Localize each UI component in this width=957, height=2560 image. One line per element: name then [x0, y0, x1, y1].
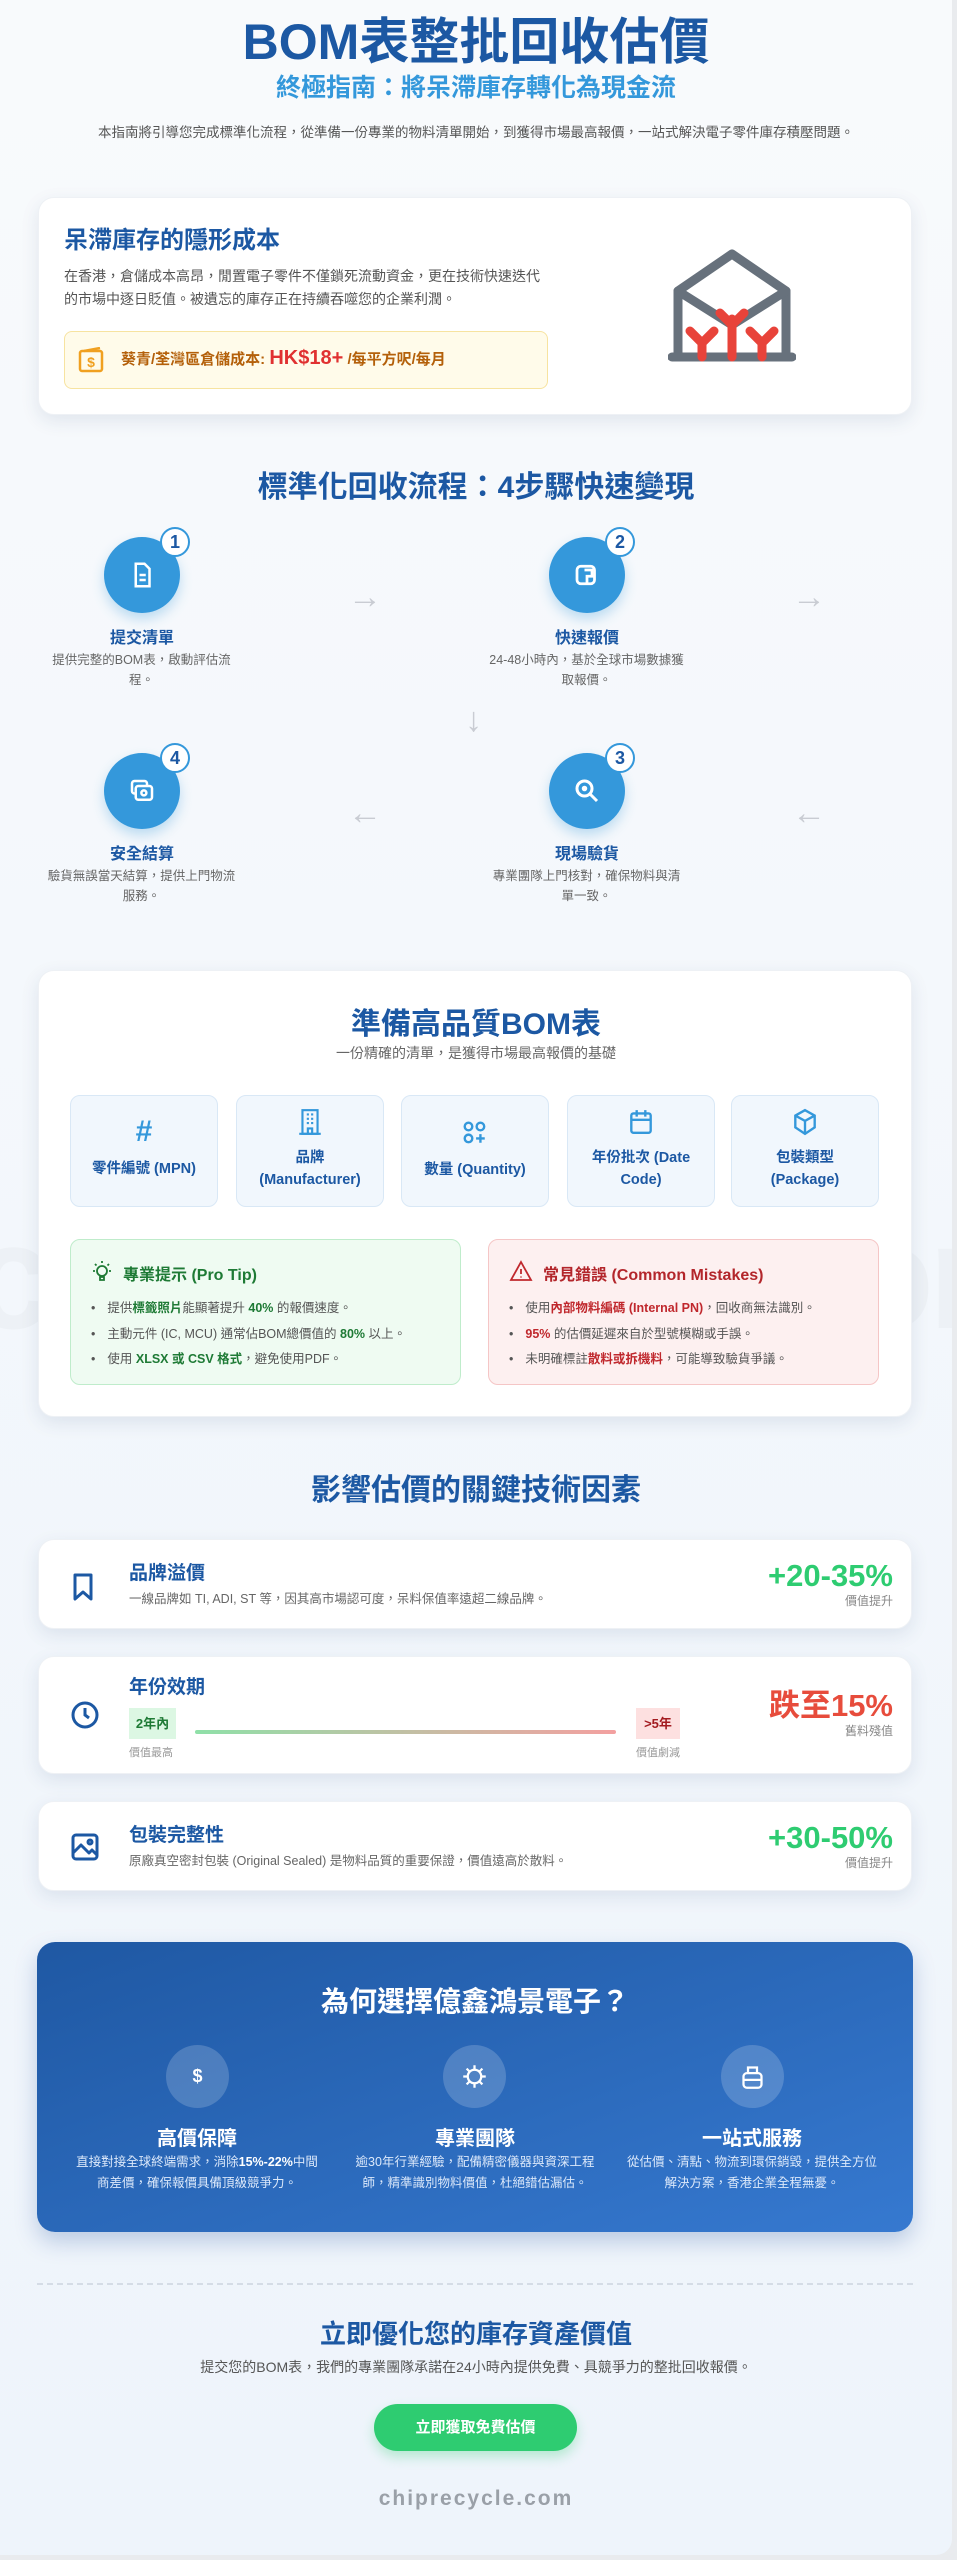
- intro text: 本指南將引導您完成標準化流程，從準備一份專業的物料清單開始，到獲得市場最高報價，一站式解決電子零件庫存積壓問題。: [98, 125, 854, 140]
- factor card: date code: 舊料殘值: [845, 1724, 893, 1738]
- heading: BOM: 準備高品質BOM表: [351, 1008, 601, 1041]
- arrow: down: ↓: [465, 701, 482, 739]
- icon: clock: [72, 1702, 98, 1728]
- field: package: [731, 1095, 879, 1207]
- arrow: →: [792, 578, 826, 616]
- tip box: common mistakes: 使用內部物料編碼 (Internal PN)，回收商無法識別。: [525, 1301, 816, 1315]
- tip box: common mistakes: 95% 的估價延遲來自於型號模糊或手誤。: [525, 1326, 754, 1340]
- arrow: →: [348, 578, 382, 616]
- field: manufacturer: [236, 1095, 384, 1207]
- text: high price: 高價保障: [157, 2128, 237, 2150]
- icon: warehouse: [668, 249, 796, 362]
- title: BOM表整批回收估價: [243, 14, 709, 70]
- icon: search: [549, 753, 625, 829]
- panel: hidden cost: [38, 197, 912, 415]
- panel: why choose us: [37, 1942, 913, 2232]
- arrow: left: ←: [348, 794, 382, 832]
- arrow: left: ←: [792, 794, 826, 832]
- chart: age bar: [129, 1708, 680, 1759]
- CTA text: 提交您的BOM表，我們的專業團隊承諾在24小時內提供免費、具競爭力的整批回收報價。: [200, 2359, 752, 2375]
- step 2: [489, 527, 684, 687]
- tip box: pro tip: 提供標籤照片能顯著提升 40% 的報價速度。: [107, 1301, 352, 1315]
- callout: storage cost: 葵青/荃灣區倉儲成本: HK$18+ /每平方呎/每月: [121, 347, 446, 369]
- factor card: packaging: [38, 1801, 912, 1891]
- step 4: [48, 743, 235, 903]
- tip box: pro tip: 專業提示 (Pro Tip): [123, 1267, 257, 1284]
- text: one stop: 一站式服務: [702, 2128, 802, 2150]
- icon: payment: [104, 753, 180, 829]
- factor card: date code: 跌至15%: [769, 1688, 893, 1723]
- step 3: 3: [615, 748, 625, 768]
- field: manufacturer: (Manufacturer): [259, 1172, 361, 1188]
- CTA button: 立即獲取免費估價: [415, 2419, 536, 2436]
- field: package: (Package): [771, 1172, 839, 1188]
- icon: money: $: [87, 354, 95, 370]
- chart: age bar: 價值最高: [129, 1747, 173, 1759]
- chart: age bar: >5年: [644, 1716, 672, 1731]
- paragraph: 在香港，倉儲成本高昂，閒置電子零件不僅鎖死流動資金，更在技術快速迭代的市場中逐日貶值。被遺忘的庫存正在持續吞噬您的企業利潤。: [64, 268, 540, 307]
- step 2: 快速報價: [555, 630, 619, 647]
- step 4: 驗貨無誤當天結算，提供上門物流服務。: [48, 869, 235, 903]
- field: date code: 年份批次 (Date: [592, 1150, 690, 1166]
- icon: money: [78, 347, 104, 372]
- step 1: [52, 527, 231, 687]
- heading: 為何選擇億鑫鴻景電子？: [321, 1986, 629, 2017]
- chart: age bar: 2年內: [136, 1716, 169, 1731]
- heading: process: 標準化回收流程：4步驟快速變現: [258, 471, 694, 504]
- factor card: date code: [38, 1656, 912, 1774]
- icon: bulb: [93, 1261, 111, 1281]
- icon: file: [104, 537, 180, 613]
- factor card: date code: 年份效期: [129, 1677, 205, 1698]
- step 4: 安全結算: [110, 846, 174, 863]
- factor card: packaging: 原廠真空密封包裝 (Original Sealed) 是物料品質的重要保證，價值遠高於散料。: [129, 1854, 567, 1868]
- CTA heading: 立即優化您的庫存資產價值: [320, 2319, 632, 2349]
- panel: why choose us: 從估價、清點、物流到環保銷毀，提供全方位解決方案，香港企業全程無憂。: [627, 2155, 877, 2190]
- icon: box: [721, 2045, 784, 2108]
- icon: dollar: $: [192, 2066, 202, 2086]
- panel: why choose us: 逾30年行業經驗，配備精密儀器與資深工程師，精準識別物料價值，杜絕錯估漏估。: [356, 2155, 594, 2190]
- field: package: 包裝類型: [776, 1150, 834, 1166]
- field: quantity: [401, 1095, 549, 1207]
- panel: why choose us: 直接對接全球終端需求，消除15%-22%中間商差價，確保報價具備頂級競爭力。: [76, 2155, 318, 2190]
- step 3: 專業團隊上門核對，確保物料與清單一致。: [493, 869, 680, 903]
- panel: BOM quality: [38, 970, 912, 1417]
- icon: chip: [443, 2045, 506, 2108]
- icon: dollar: [166, 2045, 229, 2108]
- factor card: packaging: 價值提升: [845, 1856, 893, 1870]
- field: MPN: [70, 1095, 218, 1207]
- step 3: 現場驗貨: [555, 846, 619, 863]
- icon: bookmark: [74, 1574, 92, 1601]
- factor card: brand: 品牌溢價: [129, 1563, 205, 1584]
- step 1: 提供完整的BOM表，啟動評估流程。: [52, 653, 231, 687]
- step 1: 提交清單: [110, 630, 174, 647]
- heading: 呆滯庫存的隱形成本: [64, 227, 280, 254]
- tip box: pro tip: 主動元件 (IC, MCU) 通常佔BOM總價值的 80% 以上。: [107, 1326, 406, 1340]
- tip box: common mistakes: 未明確標註散料或拆機料，可能導致驗貨爭議。: [525, 1352, 788, 1366]
- factor card: brand: [38, 1539, 912, 1629]
- step 4: 4: [170, 748, 180, 768]
- tip box: pro tip: [70, 1239, 461, 1385]
- field: quantity: 數量 (Quantity): [424, 1162, 526, 1178]
- icon: quote: [549, 537, 625, 613]
- step 2: 2: [615, 532, 625, 552]
- field: MPN: #: [136, 1115, 152, 1148]
- field: date code: [567, 1095, 715, 1207]
- subtitle: 終極指南：將呆滯庫存轉化為現金流: [276, 74, 676, 102]
- tip box: common mistakes: [488, 1239, 879, 1385]
- tip box: common mistakes: 常見錯誤 (Common Mistakes): [543, 1267, 763, 1284]
- field: manufacturer: 品牌: [296, 1150, 324, 1166]
- factor card: packaging: 包裝完整性: [129, 1825, 224, 1846]
- step 3: [493, 743, 680, 903]
- step 1: 1: [170, 532, 180, 552]
- factor card: brand: 價值提升: [845, 1594, 893, 1608]
- field: MPN: 零件編號 (MPN): [92, 1161, 196, 1177]
- subheading: 一份精確的清單，是獲得市場最高報價的基礎: [336, 1045, 616, 1061]
- tip box: pro tip: 使用 XLSX 或 CSV 格式，避免使用PDF。: [107, 1352, 342, 1366]
- footer: chiprecycle.com: [379, 2487, 573, 2510]
- factor card: brand: 一線品牌如 TI, ADI, ST 等，因其高市場認可度，呆料保值率遠超二線品牌。: [129, 1592, 547, 1606]
- icon: image: [72, 1834, 98, 1860]
- field: date code: Code): [620, 1172, 662, 1188]
- text: team: 專業團隊: [435, 2128, 515, 2150]
- factor card: brand: +20-35%: [768, 1558, 893, 1593]
- heading: factors: 影響估價的關鍵技術因素: [311, 1474, 641, 1507]
- CTA button: [374, 2404, 577, 2451]
- callout: storage cost: [64, 331, 548, 389]
- icon: warning: [510, 1260, 532, 1281]
- step 2: 24-48小時內，基於全球市場數據獲取報價。: [489, 653, 684, 687]
- factor card: packaging: +30-50%: [768, 1820, 893, 1855]
- chart: age bar: 價值劇減: [636, 1747, 680, 1759]
